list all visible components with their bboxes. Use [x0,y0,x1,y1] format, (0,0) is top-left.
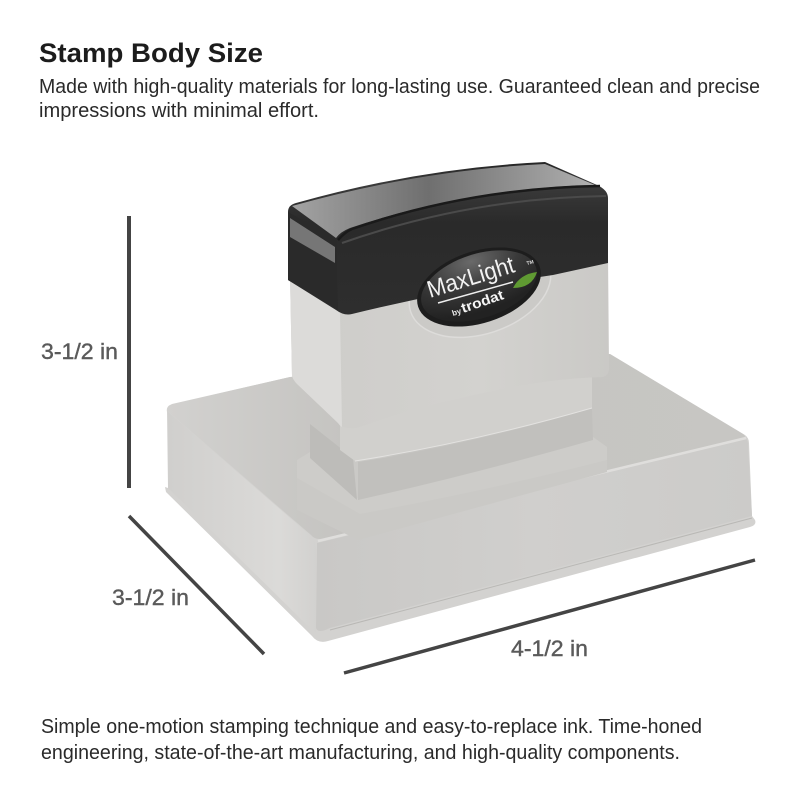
height label: 3-1/2 in [41,339,118,364]
width label: 4-1/2 in [511,636,588,661]
intro text: impressions with minimal effort. [39,100,319,122]
title: Stamp Body Size [39,38,263,68]
icon: leaf [513,272,537,288]
intro text [39,76,760,122]
height dimension line [127,216,131,488]
logo badge: trodat [459,286,506,316]
logo badge: by [451,306,463,318]
depth dimension line [129,516,264,654]
footer text: Simple one-motion stamping technique and easy-to-replace ink. Time-honed [41,716,702,738]
width dimension line [344,560,755,673]
footer text [41,716,702,764]
stamp grip body [290,224,609,428]
logo underline [438,282,513,303]
logo recess [397,224,563,354]
logo badge: MaxLight [424,252,518,304]
intro text: Made with high-quality materials for long-lasting use. Guaranteed clean and precise [39,76,760,98]
logo badge: TM [526,259,535,267]
depth label: 3-1/2 in [112,585,189,610]
stamp base [165,354,755,642]
stamp lower step [297,437,607,540]
logo badge [407,233,551,341]
stamp black cap [288,162,608,314]
footer text: engineering, state-of-the-art manufacturing, and high-quality components. [41,742,680,764]
stamp illustration [165,162,755,642]
stamp neck [310,370,593,500]
